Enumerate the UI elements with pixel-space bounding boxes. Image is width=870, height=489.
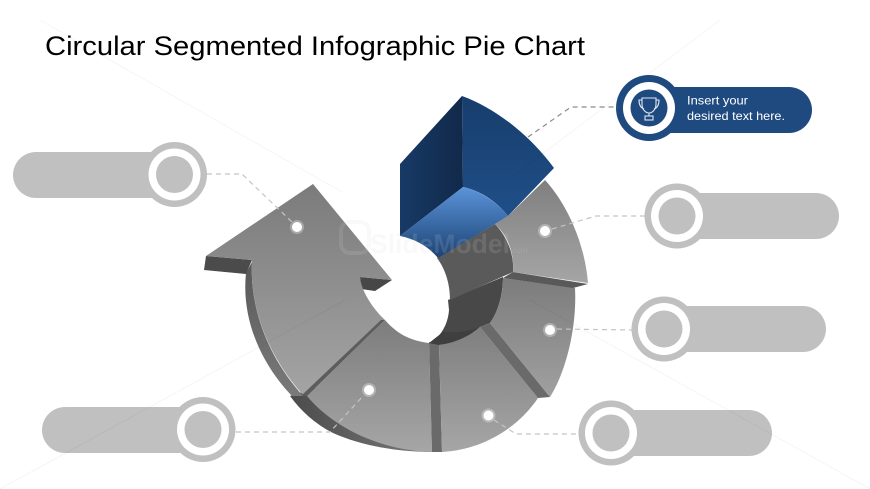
- blue segment left face: [400, 96, 463, 236]
- connector: left top: [207, 174, 292, 222]
- segment 4 face: [490, 278, 575, 397]
- watermark: .com: [510, 246, 528, 255]
- connector: right upper: [552, 216, 645, 229]
- label pill: left lower: [42, 397, 236, 462]
- marker: segment 3: [482, 408, 496, 422]
- marker: segment 2: [362, 383, 376, 397]
- seam between segment 3 and 4: [480, 323, 550, 398]
- seam between segment 2 and 3: [429, 342, 442, 452]
- marker: arrow: [290, 220, 304, 234]
- arrow head underside right: [360, 277, 392, 291]
- blue segment light underside: [400, 187, 508, 258]
- connector: blue: [528, 107, 618, 137]
- highlighted label: blue pill: desired text here.: [687, 109, 785, 123]
- highlighted label: blue pill: [616, 75, 812, 141]
- label pill: left top: [13, 142, 207, 207]
- label pill: right lower: [578, 400, 772, 466]
- arrow head underside left: [204, 256, 252, 274]
- segment 1: arrow top face: [206, 184, 392, 395]
- inner wall lower crescent: [429, 327, 480, 345]
- marker: segment 5: [538, 224, 552, 238]
- connector: right lower: [494, 420, 580, 434]
- segment 2 face: [307, 320, 432, 452]
- watermark: [341, 222, 528, 259]
- connector: left lower: [236, 396, 363, 432]
- segment 5 face: [495, 180, 588, 283]
- label pill: right middle: [632, 296, 826, 362]
- blue segment right face: [462, 96, 554, 216]
- label pill: right upper: [644, 184, 839, 248]
- inner wall lower: [429, 277, 503, 345]
- arrow stem outer side wall: [245, 262, 303, 396]
- watermark: SlideModel: [370, 229, 510, 259]
- segment 3 face: [439, 327, 538, 452]
- seam between arrow and segment 2: [302, 320, 385, 396]
- title: Circular Segmented Infographic Pie Chart: [45, 31, 586, 61]
- marker: segment 4: [543, 323, 557, 337]
- seam between segment 4 and 5: [503, 272, 588, 288]
- 3D circular arrow chart: [204, 96, 588, 452]
- label text: Insert your: [687, 94, 748, 108]
- inner wall upper: [437, 224, 513, 300]
- icon: trophy: [639, 98, 659, 120]
- segment 2 outer side wall: [290, 380, 432, 452]
- connector: right middle: [557, 329, 633, 330]
